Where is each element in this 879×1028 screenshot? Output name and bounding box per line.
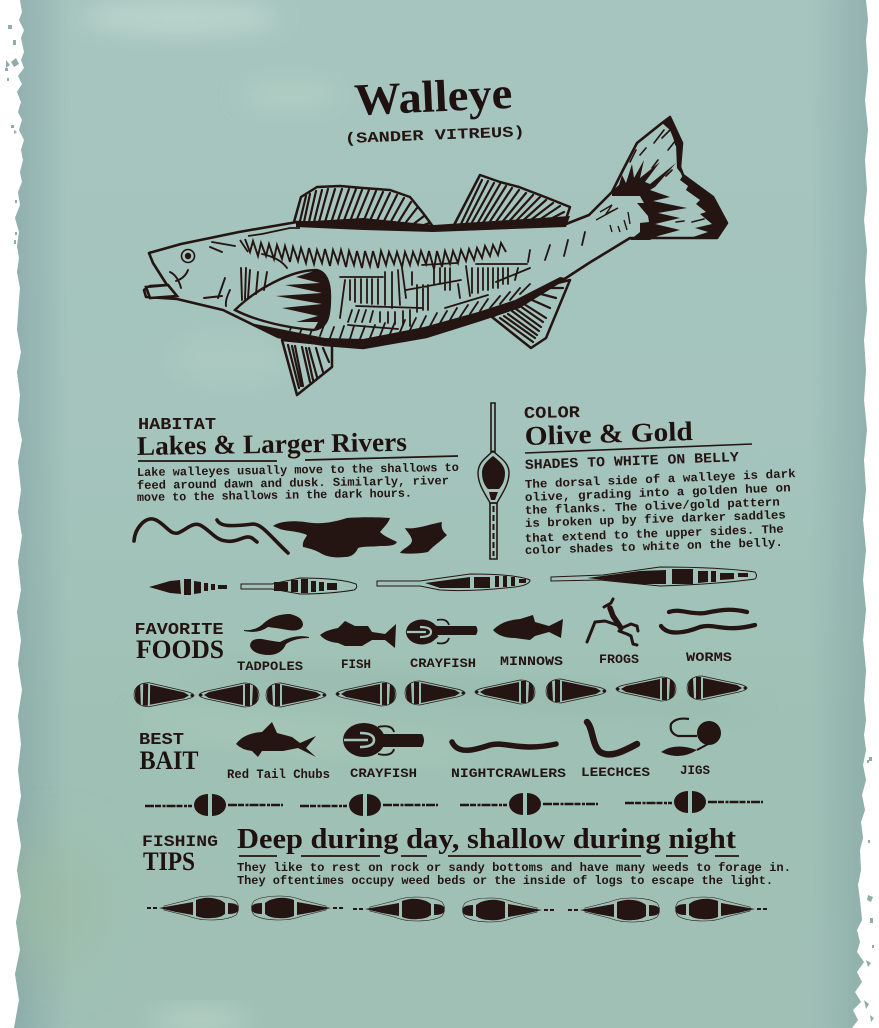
food labels: FROGS [599,652,639,667]
icon: worms [661,610,755,633]
habitat heading: Lakes & Larger Rivers [137,427,407,461]
fishing tips label: TIPS [143,847,195,876]
color subheading: SHADES TO WHITE ON BELLY [525,450,740,474]
icon: red tail chub [236,722,316,757]
panel: fishing tips [142,824,791,888]
icon: tadpoles [244,614,309,655]
habitat body text: feed around dawn and dusk. Similarly, river [137,474,449,493]
fishing tips body text: They oftentimes occupy weed beds or the inside of logs to escape the light. [237,874,773,888]
fishing tips body text [237,861,791,888]
best bait eyebrow: BEST [139,730,184,749]
habitat body text: Lake walleyes usually move to the shallows to [137,461,459,480]
icon: crayfish [343,723,424,757]
panel: habitat [134,415,459,557]
lure 1 [149,579,227,595]
food labels: CRAYFISH [410,656,476,671]
icon: lakes [273,517,447,557]
icon: minnow [493,615,563,640]
bobber row [145,791,763,816]
best bait heading: BAIT [140,746,198,775]
bait labels [227,763,710,782]
lure 3 [377,574,530,591]
bait labels: JIGS [680,763,710,778]
color body text: that extend to the upper sides. The [525,523,784,546]
dorsal fin rays [300,180,566,227]
food labels: MINNOWS [500,654,563,669]
body and tail outline [144,117,727,348]
habitat heading underline [138,456,458,461]
favorite foods heading: FOODS [136,635,224,664]
icon: frog [587,599,638,645]
gill and head lines [170,242,287,306]
favorite foods eyebrow: FAVORITE [134,620,224,639]
lure row 2 [134,676,747,708]
lure 2 [241,578,357,594]
tail shading [662,116,683,176]
food labels [237,650,732,674]
food labels: FISH [341,657,371,672]
flank zigzag scale band [245,239,506,269]
color heading: Olive & Gold [524,416,693,451]
bait labels: Red Tail Chubs [227,768,330,782]
fishing tips body text: They like to rest on rock or sandy bottoms and have many weeds to forage in. [237,861,791,875]
panel: color [524,403,796,558]
color body text [525,467,796,558]
bait labels: LEECHCES [581,765,650,780]
habitat body text: move to the shallows in the dark hours. [137,487,412,505]
color body text: The dorsal side of a walleye is dark [525,467,796,492]
bait labels: NIGHTCRAWLERS [451,766,566,781]
habitat body text [137,461,459,505]
color body text: olive, grading into a golden hue on [525,481,791,505]
color eyebrow: COLOR [524,403,580,423]
color heading underline [525,444,752,453]
lure row 1 [149,567,756,595]
anal and pelvic fin rays [288,288,563,388]
color body text: the flanks. The olive/gold pattern [525,496,780,518]
fishing tips heading underline [239,855,739,857]
eye [182,250,194,262]
color body text: is broken up by five darker saddles [525,508,786,531]
panel: favorite foods [134,599,755,674]
habitat eyebrow: HABITAT [138,415,216,434]
icon: crayfish [406,620,478,644]
panel: best bait [139,719,721,782]
illustration: walleye fish [144,116,727,395]
icon: vertical bobber float [478,403,509,559]
fishing tips heading: Deep during day, shallow during night [237,824,737,855]
subtitle: scientific name: (SANDER VITREUS) [345,124,525,148]
icon: nightcrawler [452,742,556,750]
icon: rivers [134,519,288,553]
mouth [146,285,177,298]
tail base scale marks [596,205,630,232]
body scale marks [340,232,585,329]
title: Walleye [353,68,513,125]
fishing tips eyebrow: FISHING [142,833,218,851]
dorsal base shadow [296,216,570,232]
bait labels: CRAYFISH [350,766,417,781]
icon: fish [320,621,396,648]
lure row 4 [147,896,767,922]
icon: leech [587,722,637,754]
fins silhouette [282,175,570,395]
icon: jig [661,719,721,756]
food labels: TADPOLES [237,659,303,674]
lure 4 [551,567,756,586]
pectoral fin [235,270,330,330]
belly shadow [250,277,566,348]
food labels: WORMS [686,650,732,665]
color body text: color shades to white on the belly. [525,536,783,558]
